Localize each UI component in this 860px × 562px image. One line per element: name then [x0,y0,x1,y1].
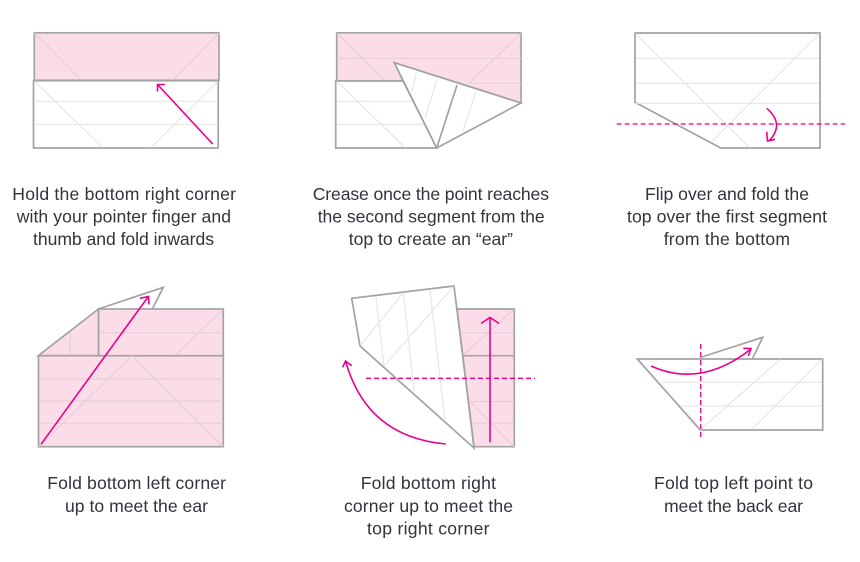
text: step 3 caption: Flip over and fold the [645,184,809,204]
diagram: step 6 fold top left point [637,337,823,438]
icon: back ear [700,337,763,359]
diagram: step 3 flip and fold [617,33,845,148]
arrow: corner to fold line [158,84,213,144]
panel: folded sheet [637,359,823,430]
text: step 2 caption: top to create an “ear” [349,229,513,249]
panel: pink sheet behind [457,309,514,447]
text: step 5 caption [344,473,513,538]
panel: white folded flap [352,286,474,448]
arrow: curved to ear [651,348,751,374]
fold line: dashed horizontal [617,123,845,125]
text: step 2 caption: the second segment from the [318,206,545,226]
fold line: dashed vertical [700,344,702,438]
text: step 2 caption: Crease once the point reaches [313,184,549,204]
text: step 5 caption: top right corner [367,518,490,538]
arrow: diagonal to ear [41,296,149,444]
arrow: straight up [481,318,499,442]
panel: pink top sheet [337,33,521,103]
text: step 6 caption: Fold top left point to [654,473,813,493]
text: step 4 caption: up to meet the ear [65,496,208,516]
panel: upper pink layer [98,309,223,356]
text: step 2 caption [313,184,549,249]
text: step 1 caption: thumb and fold inwards [33,229,214,249]
panel: pink top sheet [34,33,219,80]
diagram: step 2 crease the ear [336,33,521,148]
panel: white lower sheet [336,81,437,148]
text: step 6 caption [654,473,813,516]
arrow: curved fold down [767,108,777,141]
text: step 3 caption: from the bottom [664,229,790,249]
panel: white folded sheet [34,81,218,148]
text: step 4 caption [47,473,226,516]
arrow: curved sweep [343,361,446,444]
text: step 6 caption: meet the back ear [664,496,803,516]
text: step 1 caption [12,184,236,249]
text: step 3 caption [627,184,827,249]
panel: lower pink sheet [38,356,223,447]
panel: left pink triangle [38,309,98,356]
diagram: step 4 fold bottom left corner [38,287,223,447]
text: step 4 caption: Fold bottom left corner [47,473,226,493]
text: step 1 caption: with your pointer finger and [16,206,231,226]
diagram: step 5 fold bottom right corner [343,286,535,448]
icon: back ear [98,287,163,309]
panel: flipped sheet [635,33,820,148]
text: step 1 caption: Hold the bottom right corner [12,184,236,204]
text: step 3 caption: top over the first segment [627,206,827,226]
text: step 5 caption: corner up to meet the [344,496,513,516]
text: step 5 caption: Fold bottom right [361,473,496,493]
panel: folded flap [394,63,521,148]
diagram: step 1 fold bottom right corner [34,33,219,148]
fold line: dashed horizontal [366,377,535,379]
